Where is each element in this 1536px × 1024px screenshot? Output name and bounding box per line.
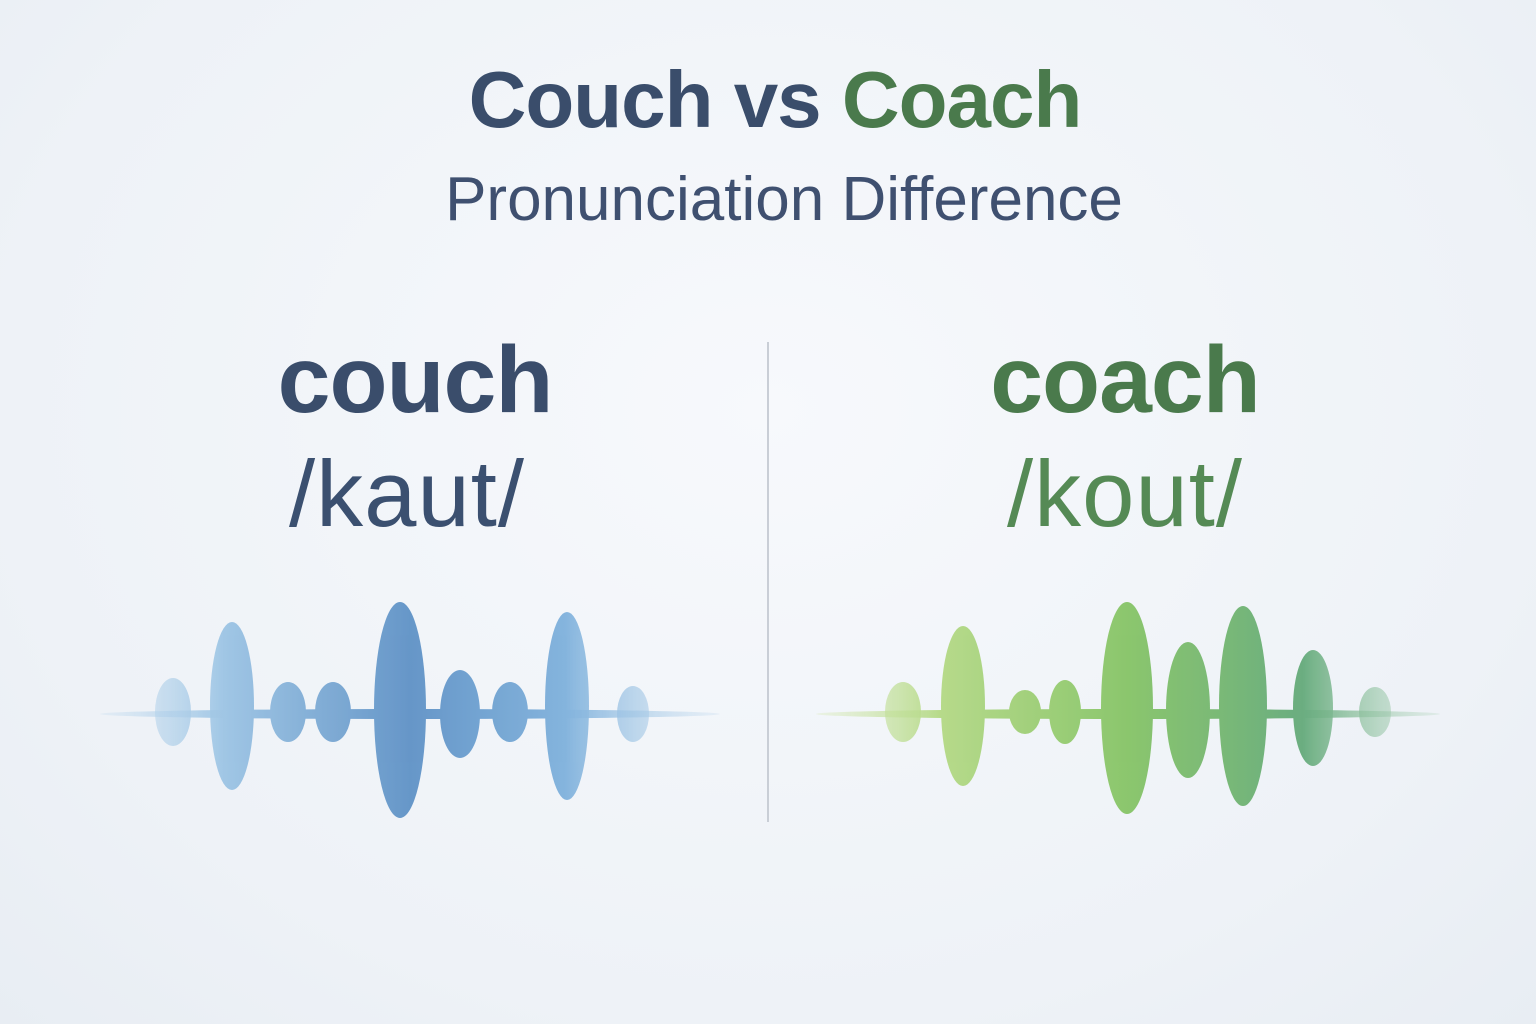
title: Couch vs Coach — [469, 55, 1081, 144]
phonetic: couch: /kaut/ — [289, 441, 525, 546]
subtitle: Pronunciation Difference — [445, 165, 1123, 234]
phonetic: coach: /kout/ — [1007, 441, 1243, 546]
panel: couch — [278, 327, 552, 546]
waveform: couch — [100, 602, 720, 818]
word: couch: couch — [278, 327, 552, 433]
panel: coach — [990, 327, 1260, 546]
divider — [767, 342, 769, 822]
word: coach: coach — [990, 327, 1260, 433]
waveform: coach — [816, 602, 1440, 814]
